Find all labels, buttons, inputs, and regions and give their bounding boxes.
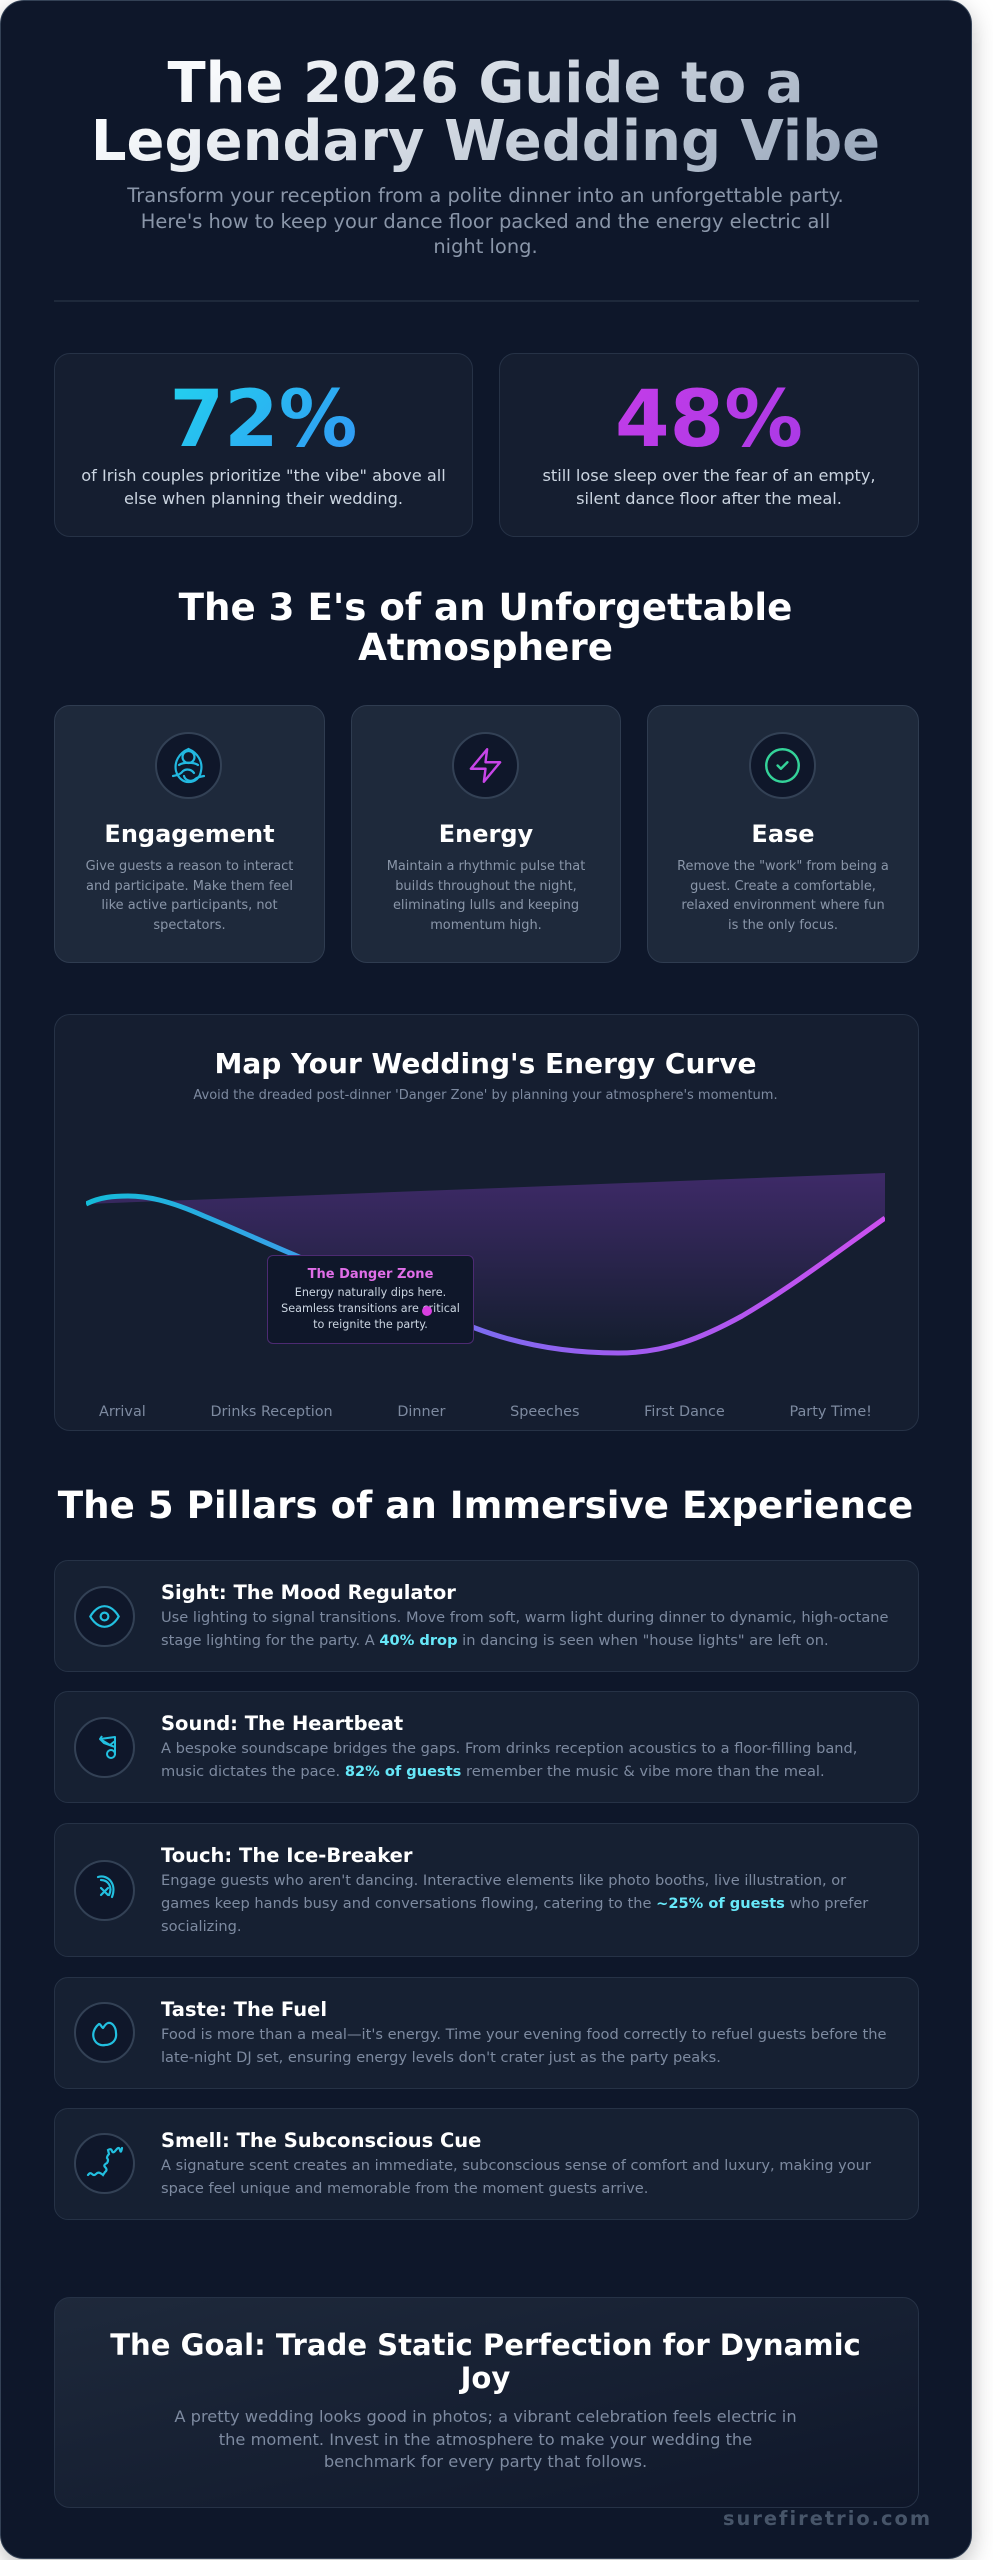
axis labels: Speeches xyxy=(510,1404,579,1420)
pillar: sound xyxy=(54,1691,919,1803)
pillar: sight xyxy=(54,1560,919,1672)
engagement label: Engagement xyxy=(104,820,275,848)
title: Legendary Wedding Vibe xyxy=(91,109,880,174)
subtitle xyxy=(127,184,844,258)
icon: sound xyxy=(74,1717,135,1778)
stat caption xyxy=(81,466,446,508)
engagement text: spectators. xyxy=(153,918,226,932)
touch text: Engage guests who aren't dancing. Interactive elements like photo booths, live illustration, or xyxy=(161,1872,846,1889)
goal text: benchmark for every party that follows. xyxy=(324,2452,647,2471)
stat number 48%: 48% xyxy=(615,373,803,465)
sound text: A bespoke soundscape bridges the gaps. From drinks reception acoustics to a floor-filling band, xyxy=(161,1740,857,1757)
heading: 5 pillars: The 5 Pillars of an Immersive Experience xyxy=(58,1483,913,1527)
heading: 3 E's: Atmosphere xyxy=(358,624,613,668)
axis labels: Drinks Reception xyxy=(210,1404,333,1420)
footer brand: surefiretrio.com xyxy=(723,2507,932,2530)
energy text: builds throughout the night, xyxy=(395,878,577,894)
sight title: Sight: The Mood Regulator xyxy=(161,1581,456,1604)
sight text xyxy=(161,1609,889,1649)
heading: 3 E's: The 3 E's of an Unforgettable xyxy=(179,585,792,629)
curve line xyxy=(86,1196,885,1353)
ease text: Remove the "work" from being a xyxy=(677,859,889,874)
touch title: Touch: The Ice-Breaker xyxy=(161,1844,413,1867)
title xyxy=(91,51,880,174)
axis labels: First Dance xyxy=(644,1404,725,1420)
heading: 3 E's xyxy=(178,585,792,668)
ease text xyxy=(677,859,889,932)
touch text: games keep hands busy and conversations flowing, catering to the ~25% of guests who prefer xyxy=(161,1895,868,1912)
goal title xyxy=(110,2328,861,2395)
callout title: The Danger Zone xyxy=(308,1267,433,1282)
goal text: the moment. Invest in the atmosphere to make your wedding the xyxy=(219,2430,752,2449)
taste text: late-night DJ set, ensuring energy levels don't crater just as the party peaks. xyxy=(161,2049,721,2066)
subtitle: Transform your reception from a polite dinner into an unforgettable party. xyxy=(127,184,844,207)
icon: engagement xyxy=(155,732,222,799)
ease text: relaxed environment where fun xyxy=(681,898,885,913)
engagement text: and participate. Make them feel xyxy=(86,878,293,894)
pillar: touch xyxy=(54,1823,919,1957)
sound text: music dictates the pace. 82% of guests remember the music & vibe more than the meal. xyxy=(161,1763,825,1780)
touch text xyxy=(161,1872,868,1935)
ease text: guest. Create a comfortable, xyxy=(690,878,876,894)
callout text: Energy naturally dips here. xyxy=(295,1286,446,1299)
smell text: space feel unique and memorable from the moment guests arrive. xyxy=(161,2180,648,2197)
energy curve subtitle: Avoid the dreaded post-dinner 'Danger Zone' by planning your atmosphere's momentum. xyxy=(193,1088,778,1103)
icon: eye xyxy=(74,1586,135,1647)
card: Ease xyxy=(647,705,919,963)
taste text xyxy=(161,2026,886,2066)
pillar: taste xyxy=(54,1977,919,2089)
sight text: stage lighting for the party. A 40% drop in dancing is seen when "house lights" are left on. xyxy=(161,1632,829,1649)
taste title: Taste: The Fuel xyxy=(161,1998,327,2021)
stat caption: still lose sleep over the fear of an empty, xyxy=(542,466,876,485)
axis labels: Party Time! xyxy=(789,1404,872,1420)
pillar: smell xyxy=(54,2108,919,2220)
stat caption: of Irish couples prioritize "the vibe" above all xyxy=(81,466,446,485)
stat card: 72% xyxy=(54,353,473,537)
engagement text: Give guests a reason to interact xyxy=(86,859,293,874)
area fill xyxy=(86,1173,885,1353)
stat caption xyxy=(542,466,876,508)
icon: touch xyxy=(74,1860,135,1921)
axis labels: Arrival xyxy=(99,1404,146,1420)
card: Engagement xyxy=(54,705,325,963)
ease label: Ease xyxy=(751,820,815,848)
axis labels xyxy=(99,1404,872,1420)
energy text xyxy=(387,859,585,932)
axis labels: Dinner xyxy=(397,1404,445,1420)
card: Energy xyxy=(351,705,621,963)
callout: danger zone xyxy=(267,1255,474,1344)
energy text: Maintain a rhythmic pulse that xyxy=(387,859,585,874)
energy curve title: Map Your Wedding's Energy Curve xyxy=(215,1047,756,1080)
sound title: Sound: The Heartbeat xyxy=(161,1712,403,1735)
panel: energy curve xyxy=(54,1014,919,1431)
ease text: is the only focus. xyxy=(728,918,838,932)
icon: taste xyxy=(74,2002,135,2063)
sound text xyxy=(161,1740,857,1780)
energy text: eliminating lulls and keeping xyxy=(393,898,579,913)
touch text: socializing. xyxy=(161,1918,242,1935)
smell text: A signature scent creates an immediate, subconscious sense of comfort and luxury, making your xyxy=(161,2157,871,2174)
danger dot xyxy=(422,1306,432,1316)
chart: energy curve xyxy=(86,1173,885,1356)
stat number 72%: 72% xyxy=(170,373,357,465)
icon: smell xyxy=(74,2133,135,2194)
callout text xyxy=(281,1286,460,1331)
energy label: Energy xyxy=(439,820,533,848)
callout text: Seamless transitions are critical xyxy=(281,1302,460,1315)
goal text: A pretty wedding looks good in photos; a vibrant celebration feels electric in xyxy=(174,2407,797,2426)
goal title: The Goal: Trade Static Perfection for Dynamic xyxy=(110,2328,861,2362)
icon: energy bolt xyxy=(452,732,519,799)
callout text: to reignite the party. xyxy=(313,1318,428,1331)
subtitle: night long. xyxy=(433,235,538,258)
title: The 2026 Guide to a xyxy=(167,51,804,116)
smell title: Smell: The Subconscious Cue xyxy=(161,2129,481,2152)
sight text: Use lighting to signal transitions. Move from soft, warm light during dinner to dynamic, high-octane xyxy=(161,1609,889,1626)
stat card: 48% xyxy=(499,353,919,537)
icon: ease check xyxy=(749,732,816,799)
energy text: momentum high. xyxy=(430,918,542,932)
panel: goal xyxy=(54,2297,919,2508)
goal title: Joy xyxy=(461,2361,510,2395)
subtitle: Here's how to keep your dance floor packed and the energy electric all xyxy=(141,210,830,233)
engagement text: like active participants, not xyxy=(101,898,278,913)
engagement text xyxy=(86,859,293,932)
stat caption: else when planning their wedding. xyxy=(124,489,403,508)
stat caption: silent dance floor after the meal. xyxy=(576,489,842,508)
goal text xyxy=(174,2407,797,2471)
smell text xyxy=(161,2157,871,2197)
taste text: Food is more than a meal—it's energy. Time your evening food correctly to refuel guests before the xyxy=(161,2026,886,2043)
